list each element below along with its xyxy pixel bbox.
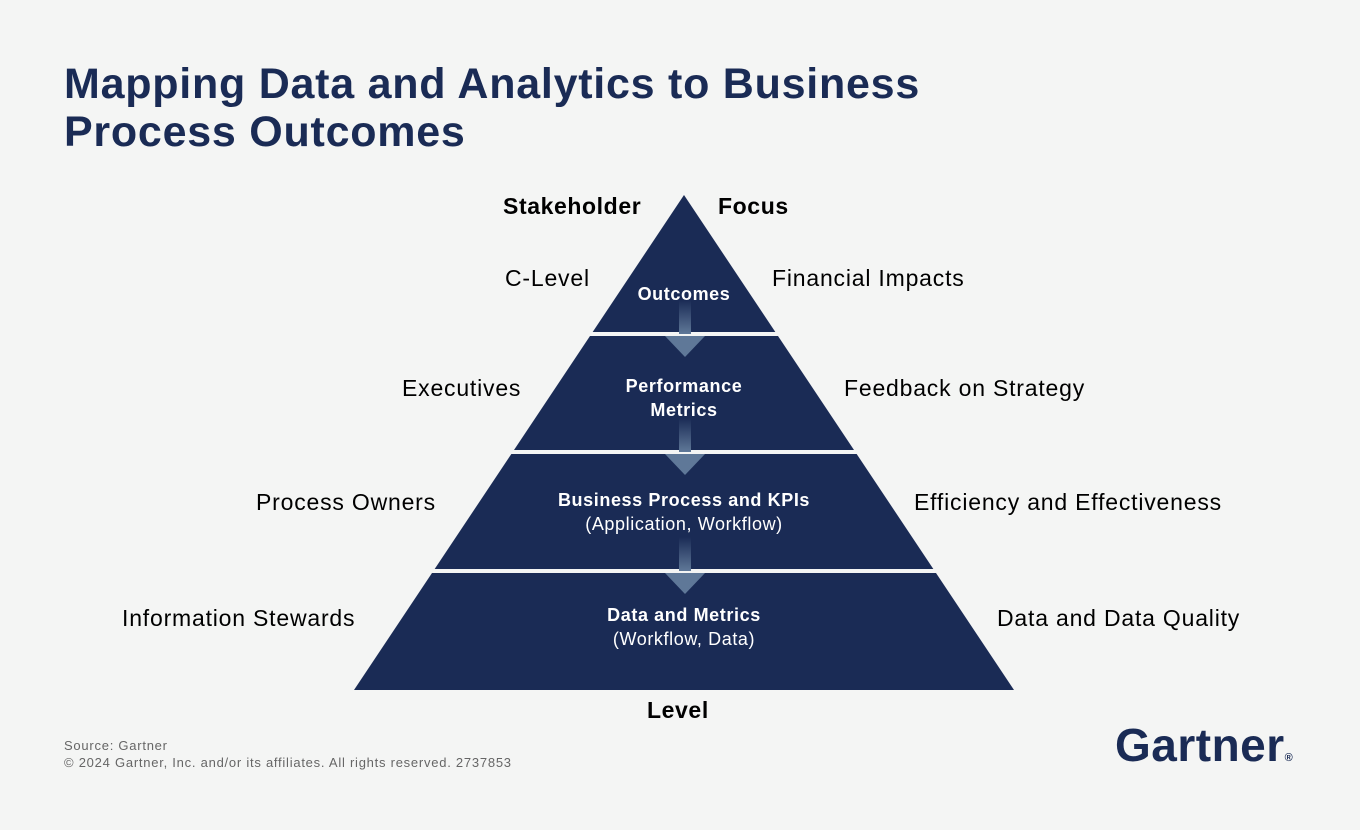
stakeholders: C-Level xyxy=(505,265,590,291)
logo: Gartner® xyxy=(1115,719,1293,771)
focus: Financial Impacts xyxy=(772,265,965,291)
source xyxy=(64,738,512,770)
title: Mapping Data and Analytics to Business xyxy=(64,60,920,108)
level labels: Performance xyxy=(626,376,742,396)
level labels xyxy=(558,284,810,649)
level labels: Business Process and KPIs xyxy=(558,490,810,510)
arrow 1 xyxy=(665,300,705,357)
headers: Stakeholder xyxy=(503,193,641,219)
text: Focus xyxy=(718,193,789,219)
level labels: Metrics xyxy=(650,400,718,420)
source: Source: Gartner xyxy=(64,738,168,753)
text: Feedback on Strategy xyxy=(844,375,1085,401)
text: Information Stewards xyxy=(122,605,355,631)
text: Executives xyxy=(402,375,521,401)
arrow 3 xyxy=(665,537,705,594)
text: Level xyxy=(647,697,709,723)
pyramid body xyxy=(354,195,1014,690)
title xyxy=(64,60,920,156)
arrow 2 xyxy=(665,418,705,475)
text: Data and Data Quality xyxy=(997,605,1240,631)
level labels: (Application, Workflow) xyxy=(585,514,783,534)
text: Process Owners xyxy=(256,489,436,515)
level labels: Data and Metrics xyxy=(607,605,761,625)
title: Process Outcomes xyxy=(64,108,466,156)
level labels: Outcomes xyxy=(638,284,730,304)
source: © 2024 Gartner, Inc. and/or its affiliates. All rights reserved. 2737853 xyxy=(64,755,512,770)
text: Efficiency and Effectiveness xyxy=(914,489,1222,515)
level labels: (Workflow, Data) xyxy=(613,629,755,649)
